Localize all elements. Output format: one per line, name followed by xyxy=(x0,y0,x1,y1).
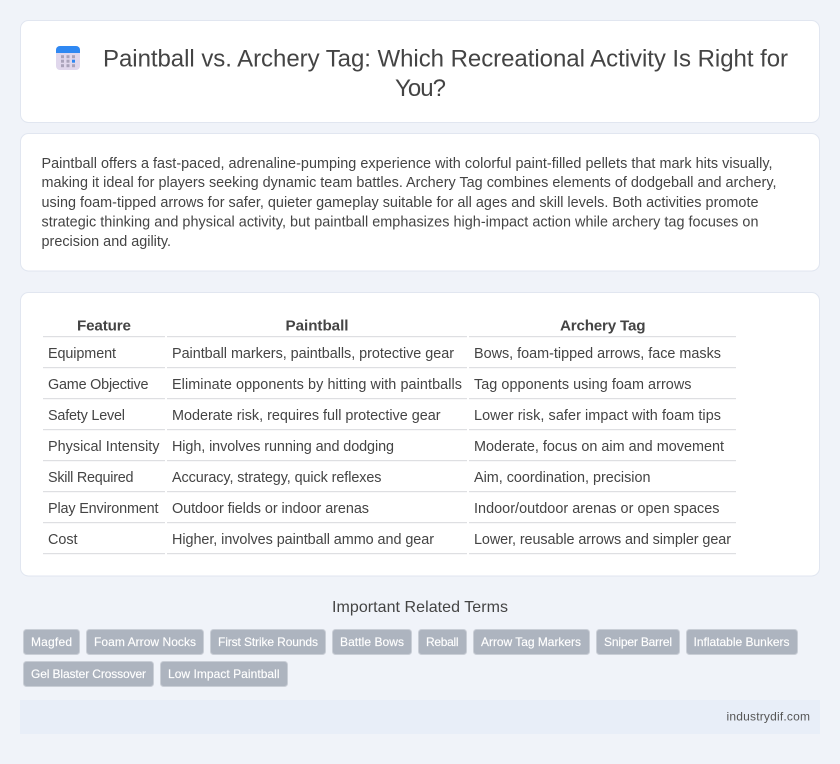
text block: summary paragraph: precision and agility. xyxy=(42,234,171,250)
table row: equipment: Bows, foam-tipped arrows, face masks xyxy=(474,346,721,362)
tag: Gel Blaster Crossover xyxy=(24,662,154,686)
table header row: Paintball xyxy=(286,318,348,334)
title: Paintball vs. Archery Tag: Which Recreational Activity Is Right for xyxy=(103,46,788,72)
table header row xyxy=(43,318,736,337)
table row: skill required: Skill Required xyxy=(48,470,134,486)
footer xyxy=(20,700,820,734)
panel: title header xyxy=(20,20,820,122)
text block: summary paragraph: making it ideal for players seeking dynamic team battles. Archery Tag combines elements of dodgeball and archery, xyxy=(42,175,776,191)
panel: comparison table xyxy=(20,292,820,576)
text block: summary paragraph: Paintball offers a fast-paced, adrenaline-pumping experience with colorful paint-filled pellets that mark hits visually, xyxy=(42,156,772,172)
tag: Battle Bows: Battle Bows xyxy=(340,635,404,649)
tag: Foam Arrow Nocks: Foam Arrow Nocks xyxy=(94,635,196,649)
tag: Magfed xyxy=(24,630,80,654)
table row: equipment: Equipment xyxy=(48,346,116,362)
tag: Inflatable Bunkers xyxy=(686,630,798,654)
tag: First Strike Rounds xyxy=(210,630,326,654)
tag: Sniper Barrel xyxy=(596,630,680,654)
table row: physical intensity: Moderate, focus on aim and movement xyxy=(474,439,724,455)
table row: safety level: Lower risk, safer impact with foam tips xyxy=(474,408,721,424)
tag: Reball: Reball xyxy=(426,635,458,649)
table header row: Feature xyxy=(77,318,131,334)
table row: safety level: Moderate risk, requires full protective gear xyxy=(172,408,441,424)
text block: summary paragraph xyxy=(42,156,776,250)
table row: physical intensity xyxy=(43,439,736,461)
panel: introduction xyxy=(20,134,820,271)
tag: First Strike Rounds: First Strike Rounds xyxy=(218,635,318,649)
table row: game objective: Tag opponents using foam arrows xyxy=(474,377,692,393)
tag: Foam Arrow Nocks xyxy=(86,630,204,654)
table row: cost: Higher, involves paintball ammo and gear xyxy=(172,532,434,548)
tag: Low Impact Paintball: Low Impact Paintball xyxy=(168,667,280,681)
tag: Reball xyxy=(418,630,466,654)
table row: play environment xyxy=(43,501,736,523)
table row: play environment: Play Environment xyxy=(48,501,158,517)
table row: game objective: Game Objective xyxy=(48,377,148,393)
table row: equipment: Paintball markers, paintballs, protective gear xyxy=(172,346,454,362)
table row: skill required: Aim, coordination, precision xyxy=(474,470,650,486)
table row: game objective xyxy=(43,377,736,399)
table row: play environment: Outdoor fields or indoor arenas xyxy=(172,501,369,517)
text block: summary paragraph: using foam-tipped arrows for safer, quieter gameplay suitable for all ages and skill levels. Both activities promote xyxy=(42,195,758,211)
table row: skill required: Accuracy, strategy, quick reflexes xyxy=(172,470,382,486)
table row: safety level: Safety Level xyxy=(48,408,125,424)
table row: game objective: Eliminate opponents by hitting with paintballs xyxy=(172,377,462,393)
footer: industrydif.com xyxy=(726,710,810,724)
title xyxy=(103,46,788,102)
tag: Low Impact Paintball xyxy=(160,662,288,686)
tag: Arrow Tag Markers: Arrow Tag Markers xyxy=(481,635,581,649)
table row: physical intensity: High, involves running and dodging xyxy=(172,439,394,455)
table row: equipment xyxy=(43,346,736,368)
tag: Arrow Tag Markers xyxy=(474,630,590,654)
table row: play environment: Indoor/outdoor arenas or open spaces xyxy=(474,501,720,517)
tag: Battle Bows xyxy=(332,630,412,654)
tag list: related terms xyxy=(24,630,798,686)
table row: safety level xyxy=(43,408,736,430)
table row: cost: Lower, reusable arrows and simpler gear xyxy=(474,532,731,548)
tag: Magfed: Magfed xyxy=(31,635,72,649)
table row: skill required xyxy=(43,470,736,492)
title: You? xyxy=(395,75,446,102)
table row: cost: Cost xyxy=(48,532,78,548)
table row: cost xyxy=(43,532,736,554)
text block: summary paragraph: strategic thinking and physical activity, but paintball emphasizes high-impact action while archery tag focuses on xyxy=(42,214,758,230)
table row: physical intensity: Physical Intensity xyxy=(48,439,160,455)
tag: Gel Blaster Crossover: Gel Blaster Crossover xyxy=(31,667,146,681)
tag: Sniper Barrel: Sniper Barrel xyxy=(604,635,672,649)
icon: calendar xyxy=(56,46,80,70)
tag: Inflatable Bunkers: Inflatable Bunkers xyxy=(694,635,790,649)
heading: important related terms: Important Related Terms xyxy=(332,599,508,616)
table header row: Archery Tag xyxy=(560,318,646,334)
